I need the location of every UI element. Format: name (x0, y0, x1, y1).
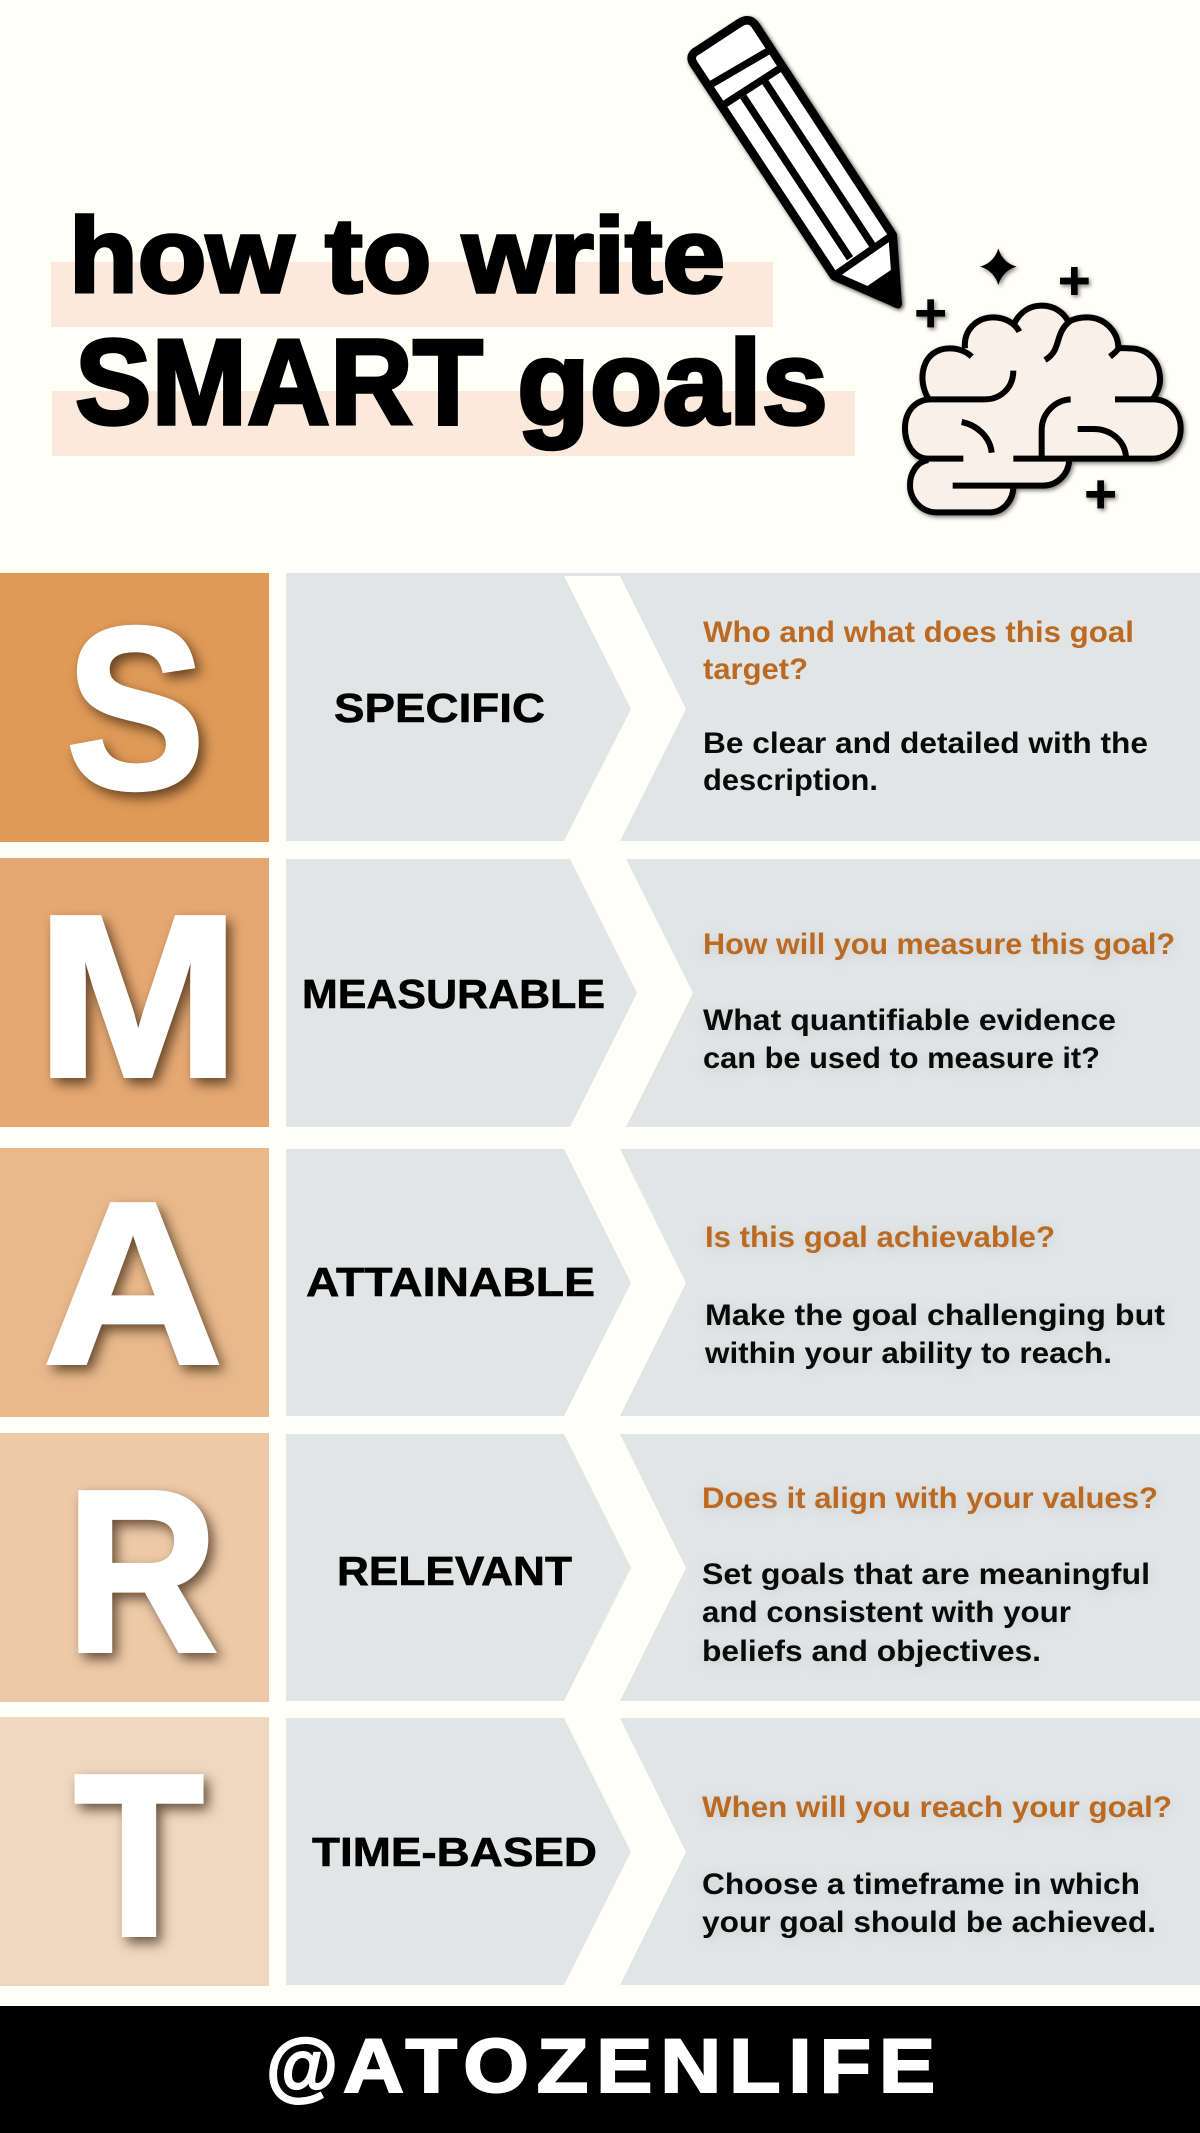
question: Does it align with your values? (702, 1482, 1158, 1515)
label: time-based: TIME-BASED (312, 1829, 597, 1875)
letter tile A: A (43, 1154, 223, 1412)
sparkles (916, 248, 1115, 508)
description (702, 1558, 1150, 1668)
description (704, 1299, 1165, 1370)
letter tile T (0, 1717, 269, 1986)
question: target? (703, 653, 808, 686)
letter tile S: S (66, 579, 205, 837)
label: relevant: RELEVANT (337, 1548, 572, 1594)
chevron band (286, 573, 1200, 841)
chevron band (286, 1718, 1200, 1985)
letter tile T: T (74, 1726, 204, 1984)
title line two (75, 314, 828, 450)
description (702, 1868, 1156, 1939)
brain outlines (905, 306, 1181, 512)
title (51, 197, 855, 456)
description (703, 1004, 1116, 1075)
title line two: SMART (75, 314, 483, 450)
description: Choose a timeframe in which (702, 1868, 1140, 1901)
panel: A attainable (0, 1148, 1200, 1417)
footer handle: ATOZENLIFE (343, 2024, 943, 2109)
description (703, 727, 1148, 797)
question: Who and what does this goal (703, 616, 1134, 649)
title highlight bars (51, 262, 855, 456)
letter tile M (0, 858, 269, 1127)
title line two: goals (517, 316, 828, 450)
question: Is this goal achievable? (705, 1221, 1055, 1254)
description: within your ability to reach. (704, 1337, 1112, 1370)
icon: brain with sparkles (905, 248, 1181, 512)
description: can be used to measure it? (703, 1042, 1100, 1075)
label: measurable: MEASURABLE (302, 971, 605, 1017)
description: and consistent with your (702, 1596, 1071, 1629)
title line one: how to write (69, 197, 725, 315)
brain fill (905, 306, 1181, 512)
question: How will you measure this goal? (703, 928, 1175, 961)
letter tile S (0, 573, 269, 842)
chevron band (286, 859, 1200, 1127)
panel: R relevant (0, 1433, 1200, 1702)
description: Make the goal challenging but (705, 1299, 1165, 1332)
description: Be clear and detailed with the (703, 727, 1148, 760)
letter tile R (0, 1433, 269, 1702)
chevron band (286, 1149, 1200, 1416)
panel: S specific (0, 573, 1200, 842)
description: your goal should be achieved. (702, 1906, 1156, 1939)
footer handle: @ (266, 2024, 338, 2109)
question: When will you reach your goal? (702, 1791, 1172, 1824)
panel: T time-based (0, 1717, 1200, 1986)
panel: M measurable (0, 858, 1200, 1127)
description: description. (703, 764, 878, 797)
label: specific: SPECIFIC (334, 685, 545, 731)
letter tile A (0, 1148, 269, 1417)
description: beliefs and objectives. (702, 1635, 1041, 1668)
description: Set goals that are meaningful (702, 1558, 1150, 1591)
description: What quantifiable evidence (703, 1004, 1116, 1037)
label: attainable: ATTAINABLE (306, 1259, 595, 1305)
question (703, 616, 1134, 686)
footer band (0, 2006, 1200, 2133)
chevron band (286, 1434, 1200, 1701)
letter tile R: R (66, 1442, 218, 1700)
icon: pencil (692, 20, 899, 306)
letter tile M: M (36, 867, 240, 1125)
